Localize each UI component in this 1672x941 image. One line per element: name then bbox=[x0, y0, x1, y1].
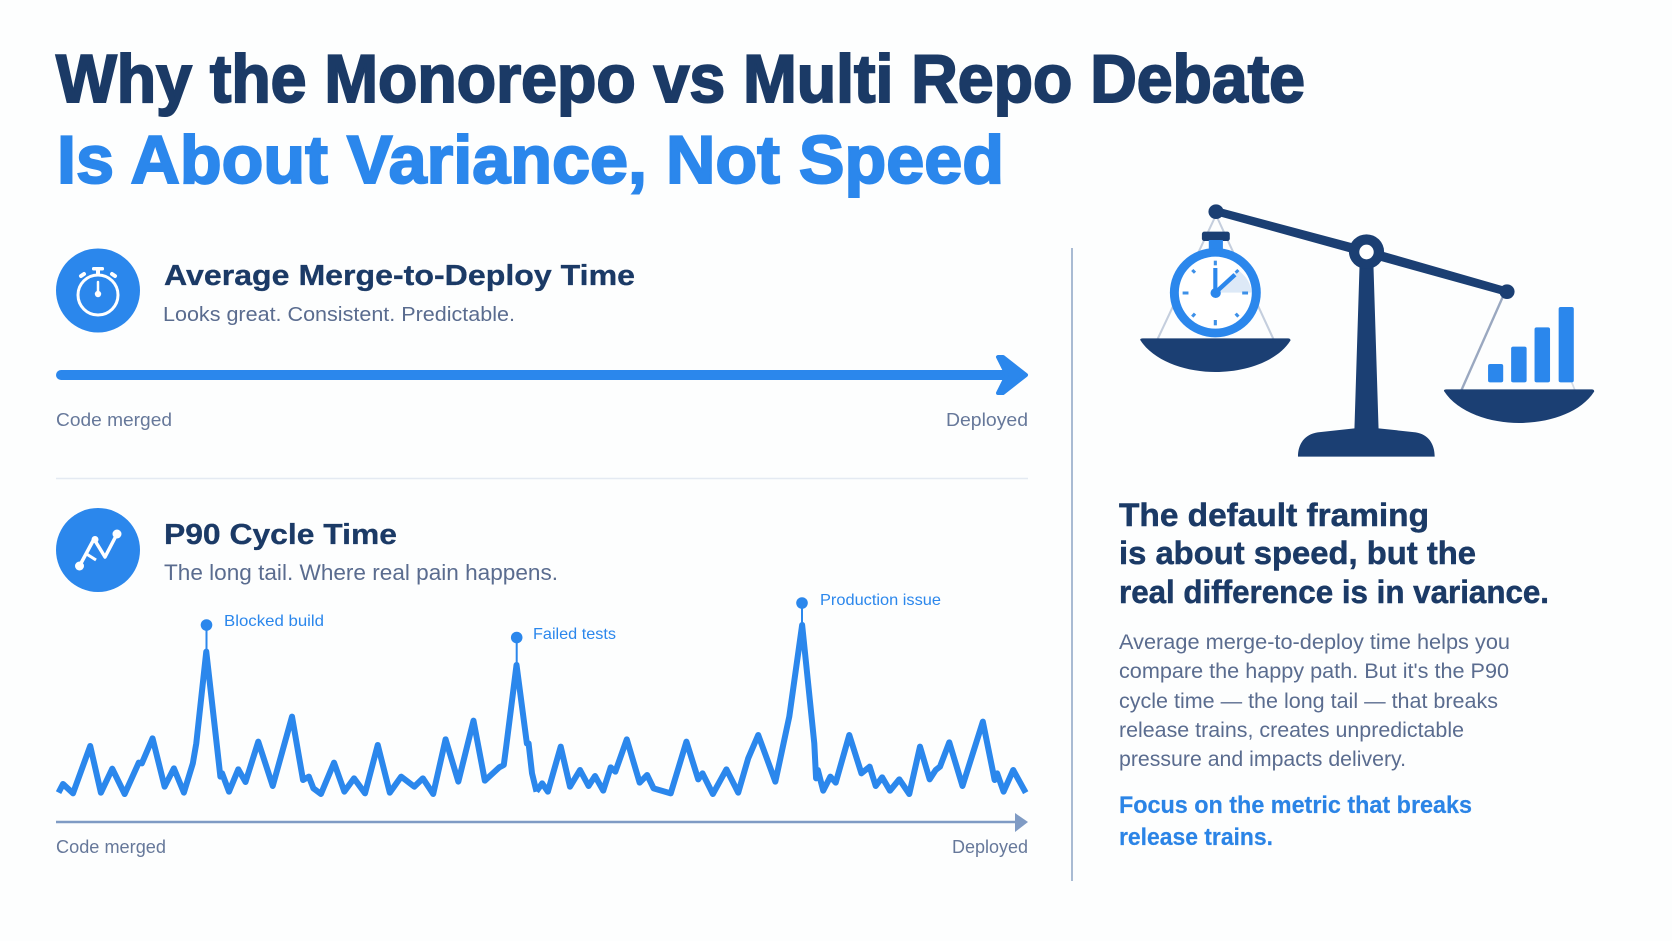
callout: focus statement: Focus on the metric that breaks bbox=[1119, 792, 1472, 819]
label: deployed: Deployed bbox=[946, 410, 1028, 430]
bar chart weight bbox=[1488, 307, 1574, 382]
heading: default framing: is about speed, but the bbox=[1119, 535, 1476, 571]
heading: P90 cycle time: P90 Cycle Time bbox=[164, 519, 397, 551]
heading: average merge-to-deploy time: Average Merge-to-Deploy Time bbox=[164, 260, 635, 292]
subheading: Looks great. Consistent. Predictable. bbox=[163, 304, 515, 326]
title line 1: Why the Monorepo vs Multi Repo Debate bbox=[56, 41, 1305, 117]
left pan strings bbox=[1157, 215, 1274, 339]
callout: blocked build bbox=[201, 613, 324, 655]
beam bbox=[1208, 204, 1515, 299]
icon: trend line bbox=[56, 508, 140, 592]
subheading: The long tail. Where real pain happens. bbox=[164, 560, 558, 585]
stand bbox=[1298, 263, 1435, 457]
label: deployed: Deployed bbox=[952, 837, 1028, 857]
heading: default framing bbox=[1119, 497, 1549, 610]
callout: focus statement: release trains. bbox=[1119, 824, 1273, 851]
label: code merged: Code merged bbox=[56, 410, 172, 430]
callout: failed tests: Failed tests bbox=[533, 626, 616, 643]
callout: blocked build: Blocked build bbox=[224, 613, 324, 630]
left pan bbox=[1140, 338, 1290, 372]
heading: default framing: The default framing bbox=[1119, 497, 1429, 533]
title bbox=[56, 41, 1305, 198]
body text: release trains, creates unpredictable bbox=[1119, 719, 1464, 742]
icon: stopwatch bbox=[56, 248, 140, 332]
body text: Average merge-to-deploy time helps you bbox=[1119, 631, 1510, 654]
right pan strings bbox=[1461, 297, 1575, 391]
callout: production issue: Production issue bbox=[820, 592, 941, 609]
title line 2: Is About Variance, Not Speed bbox=[57, 122, 1004, 198]
callout: failed tests bbox=[511, 626, 616, 670]
body text bbox=[1119, 631, 1510, 771]
panel: P90 cycle time bbox=[56, 508, 1028, 857]
label: code merged: Code merged bbox=[56, 837, 166, 857]
panel: average merge-to-deploy time bbox=[56, 248, 1028, 430]
line chart: spiky cycle times bbox=[59, 625, 1026, 794]
heading: default framing: real difference is in variance. bbox=[1119, 574, 1549, 610]
body text: pressure and impacts delivery. bbox=[1119, 748, 1406, 771]
body text: compare the happy path. But it's the P90 bbox=[1119, 660, 1509, 683]
right pan bbox=[1444, 389, 1594, 423]
callout: production issue bbox=[796, 592, 941, 628]
panel: takeaway bbox=[1119, 204, 1594, 851]
icon: balance scale bbox=[1140, 204, 1594, 457]
arrow: straight timeline bbox=[61, 357, 1026, 393]
body text: cycle time — the long tail — that breaks bbox=[1119, 690, 1498, 713]
stopwatch weight bbox=[1170, 232, 1261, 337]
arrow: chart axis bbox=[56, 813, 1028, 832]
callout: focus statement bbox=[1119, 792, 1472, 851]
pivot bbox=[1349, 234, 1384, 269]
